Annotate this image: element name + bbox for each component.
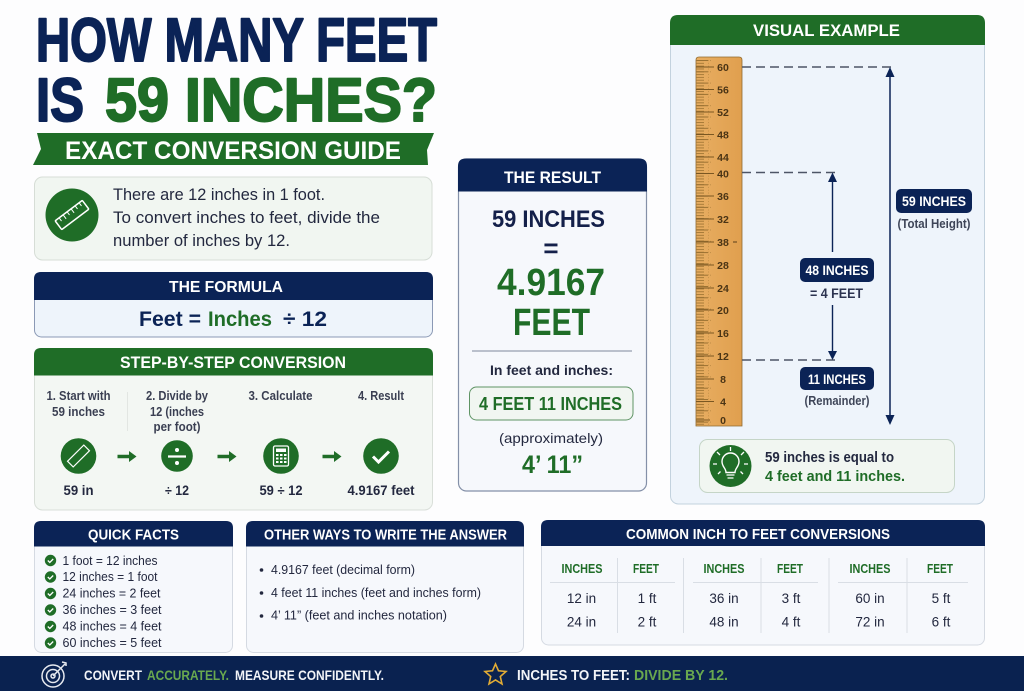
footer tip: DIVIDE BY 12. [634,668,728,684]
panel: common inch to feet conversions [541,520,985,645]
footer message: ACCURATELY. [147,667,229,683]
answer list [260,562,481,622]
panel: step-by-step conversion [34,348,433,510]
result value [492,206,605,344]
title [36,6,437,134]
step 2 [146,389,208,498]
ruler: 0 [720,415,726,427]
conversion table values: 2 ft [638,614,657,630]
ruler: 24 [717,283,729,295]
ruler: 8 [720,374,726,386]
conversion table headers: INCHES [562,561,603,576]
icon: light bulb [710,445,752,487]
label: 59 inches: 59 INCHES [902,193,966,209]
ruler: 44 [717,152,729,164]
panel: intro [34,177,432,260]
conversion table values [567,591,951,630]
conversion table headers: FEET [633,561,659,576]
ruler: 36 [717,191,729,203]
panel: the result: In feet and inches: [490,363,613,378]
ruler: 12 [717,351,729,363]
panel: other ways to write the answer: OTHER WAYS TO WRITE THE ANSWER [264,526,507,544]
panel: the result [458,158,647,491]
step 1: 59 inches [52,405,105,419]
icon: star [485,664,506,684]
step 4: 4. Result [358,389,405,403]
step 2: 12 (inches [150,405,204,419]
ruler: 4 [720,396,726,408]
arrow: total height [886,67,894,425]
panel: other ways to write the answer [246,521,524,652]
title: HOW MANY FEET [36,6,437,74]
label: 48 inches [800,258,874,301]
conversion table values: 72 in [855,614,885,630]
conversion table headers: INCHES [704,561,745,576]
fact list: 24 inches = 2 feet [62,586,161,600]
step 1: 1. Start with [46,389,110,403]
icon: ruler [46,188,98,242]
panel: quick facts [34,521,233,652]
conversion table headers: FEET [777,561,803,576]
title: 59 INCHES? [105,66,437,134]
label: 59 inches: (Total Height) [898,217,970,231]
ruler: 28 [717,260,729,272]
step 1 [46,389,110,498]
conversion table headers: FEET [927,561,953,576]
ruler: 32 [717,214,729,226]
step 4: 4.9167 feet [348,482,415,498]
conversion table headers [562,561,953,576]
conversion table values: 60 in [855,591,885,606]
result value: 4.9167 [497,262,605,304]
callout [700,440,954,492]
intro text: There are 12 inches in 1 foot. [113,186,325,204]
ruler: 38 [717,237,729,249]
fact list: 36 inches = 3 feet [62,602,162,617]
panel: quick facts: QUICK FACTS [88,526,179,544]
fact list [45,553,162,650]
formula text: ÷ 12 [283,308,327,331]
conversion table values: 12 in [567,591,596,606]
intro text: To convert inches to feet, divide the [113,209,380,227]
formula text: Feet = [139,308,201,331]
label: 48 inches: 48 INCHES [806,262,868,278]
panel: step-by-step conversion: STEP-BY-STEP CONVERSION [120,353,346,372]
answer list: 4 feet 11 inches (feet and inches form) [271,585,481,600]
fact list: 12 inches = 1 foot [62,569,158,584]
label: 59 inches [896,189,972,231]
step 3 [248,389,313,498]
ruler: 60 [717,62,729,74]
panel: visual example [670,15,985,504]
label: 48 inches: = 4 FEET [810,286,864,301]
panel: the formula: THE FORMULA [169,279,283,296]
ruler: 56 [717,84,729,96]
label: 11 inches: (Remainder) [804,394,870,408]
step 4 [348,389,415,498]
arrow: 48 inches down [828,305,837,360]
ruler: 16 [717,328,729,340]
step 2: ÷ 12 [165,482,189,498]
callout: 59 inches is equal to [765,450,894,466]
step 2: per foot) [154,420,200,434]
step 1: 59 in [64,482,94,498]
result value: = [543,233,559,263]
footer bar [0,656,1024,691]
arrow [322,451,342,462]
arrow [218,451,236,462]
panel: the result: 4’ 11” [522,451,583,479]
panel: the result: THE RESULT [504,168,602,187]
conversion table values: 5 ft [932,591,951,606]
fact list: 1 foot = 12 inches [62,553,158,568]
conversion table values: 6 ft [932,614,951,630]
label: 11 inches: 11 INCHES [808,371,866,387]
fact list: 48 inches = 4 feet [62,618,162,634]
panel: the result: (approximately) [499,430,603,446]
ruler [696,57,742,427]
fact list: 60 inches = 5 feet [62,635,162,650]
conversion table values: 4 ft [782,614,801,630]
footer message: CONVERT [84,667,142,683]
ruler: 20 [717,305,729,317]
panel: common inch to feet conversions: COMMON INCH TO FEET CONVERSIONS [626,526,890,543]
ruler: 48 [717,130,729,142]
footer tip [517,668,728,684]
step 3: 59 ÷ 12 [260,482,303,498]
conversion table values: 24 in [567,614,596,630]
label: 11 inches [800,367,874,408]
conversion table values: 3 ft [782,591,801,606]
step 2: 2. Divide by [146,389,208,403]
ruler: 52 [717,107,729,119]
arrow [118,451,136,462]
conversion table values: 48 in [709,614,739,630]
intro text [113,186,380,250]
footer message: MEASURE CONFIDENTLY. [235,667,384,683]
ruler: 40 [717,168,729,180]
result value: FEET [513,302,590,344]
intro text: number of inches by 12. [113,232,290,250]
conversion table values: 36 in [709,591,739,606]
result in feet and inches: 4 FEET 11 INCHES [479,394,622,414]
conversion table values: 1 ft [638,591,657,606]
conversion table headers: INCHES [850,561,891,576]
formula text [139,308,327,331]
arrow: 48 inches up [828,172,837,252]
subtitle ribbon: EXACT CONVERSION GUIDE [65,137,401,165]
icon: target [42,662,66,687]
footer message [84,667,384,683]
title: IS [36,66,84,134]
result in feet and inches [470,387,633,420]
answer list: 4.9167 feet (decimal form) [271,562,415,577]
answer list: 4’ 11” (feet and inches notation) [271,608,447,622]
panel: visual example: VISUAL EXAMPLE [753,21,900,40]
step 3: 3. Calculate [248,389,313,403]
footer tip: INCHES TO FEET: [517,668,630,684]
formula text: Inches [208,308,272,331]
panel: the formula [34,272,433,337]
callout: 4 feet and 11 inches. [765,469,905,485]
result value: 59 INCHES [492,206,605,233]
